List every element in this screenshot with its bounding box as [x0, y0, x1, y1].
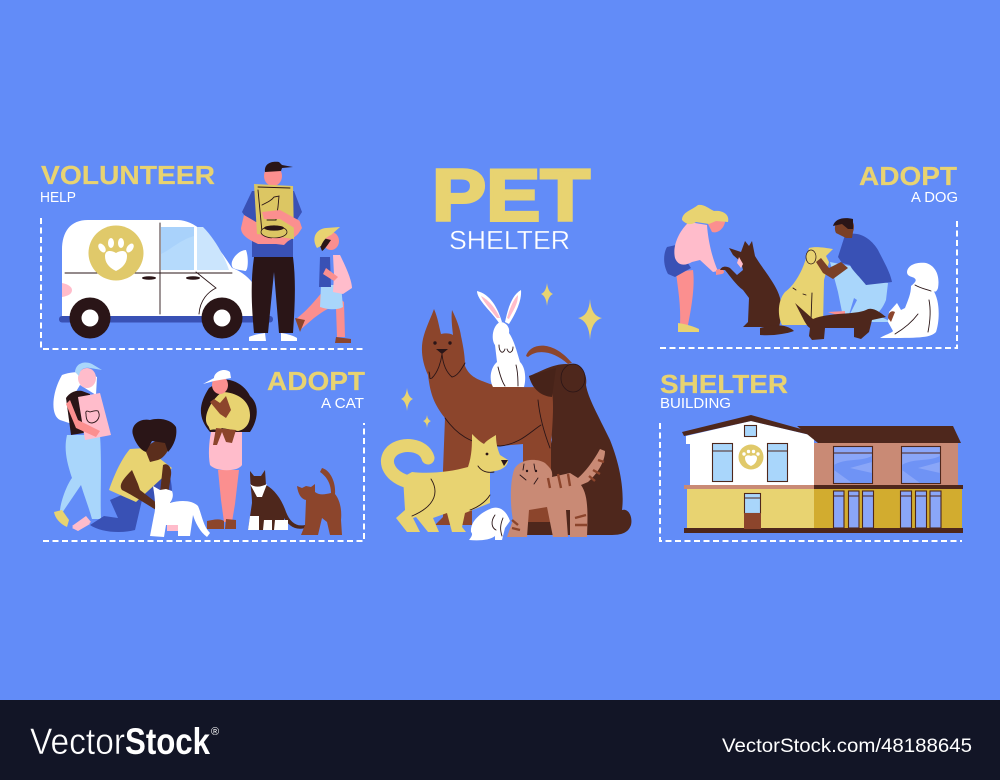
person: woman with food bag: [53, 363, 111, 531]
logo: paw: [738, 444, 764, 470]
cat: brown: [297, 468, 342, 535]
heading: adopt a dog: A DOG: [911, 189, 958, 206]
dog: golden: [779, 247, 833, 325]
rabbit: [477, 290, 525, 387]
title: PET: [432, 156, 590, 236]
dog: dark brown sitting: [525, 364, 631, 535]
person: kneeling man: [816, 218, 892, 322]
stars: [401, 283, 602, 428]
heading: shelter building: BUILDING: [660, 395, 731, 412]
footer image id: VectorStock.com/48188645: [722, 736, 972, 757]
heading: adopt a dog: [859, 161, 958, 206]
tail: [526, 346, 572, 364]
building: [682, 415, 963, 533]
person: volunteer man: [241, 162, 302, 341]
logo: vectorstock: [30, 721, 219, 762]
person: woman with blonde hair: [664, 205, 728, 332]
panel: shelter building: [660, 369, 963, 541]
heading: volunteer: [40, 160, 215, 206]
cat: white: [150, 486, 210, 537]
dog: dark shepherd: [720, 241, 794, 335]
dog muzzle overlay: [529, 368, 556, 397]
cat: black and white: [248, 470, 305, 530]
heading: adopt a cat: [267, 366, 365, 412]
heading: adopt a cat: A CAT: [321, 395, 364, 412]
panel: central animals: [387, 283, 631, 540]
dog: yellow curled tail: [387, 434, 508, 532]
logo: vectorstock: Stock: [125, 721, 210, 762]
logo: paw: [88, 226, 144, 280]
heading: volunteer: HELP: [40, 189, 76, 206]
title: SHELTER: [449, 225, 570, 255]
logo: vectorstock: ®: [211, 726, 219, 738]
panel: adopt a dog: [660, 161, 958, 348]
panel: adopt a cat: [43, 363, 365, 541]
dog: white stretching: [880, 263, 939, 338]
person: kneeling woman: [72, 419, 176, 532]
dog: dachshund: [795, 303, 886, 340]
person: woman holding cat: [201, 370, 257, 529]
heading: volunteer: VOLUNTEER: [41, 160, 215, 190]
person: child: [295, 227, 352, 343]
van: [59, 220, 273, 338]
panel: volunteer help: [40, 160, 365, 349]
heading: adopt a dog: ADOPT: [859, 161, 957, 191]
heading: shelter building: [660, 369, 788, 412]
cat: tan striped: [507, 449, 605, 537]
dog: brown great dane: [422, 309, 572, 525]
logo: vectorstock: Vector: [30, 721, 125, 762]
heading: adopt a cat: ADOPT: [267, 366, 365, 396]
heading: shelter building: SHELTER: [660, 369, 788, 399]
rabbit: small white: [469, 508, 510, 540]
windows: [712, 426, 788, 514]
footer bar: [0, 700, 1000, 780]
